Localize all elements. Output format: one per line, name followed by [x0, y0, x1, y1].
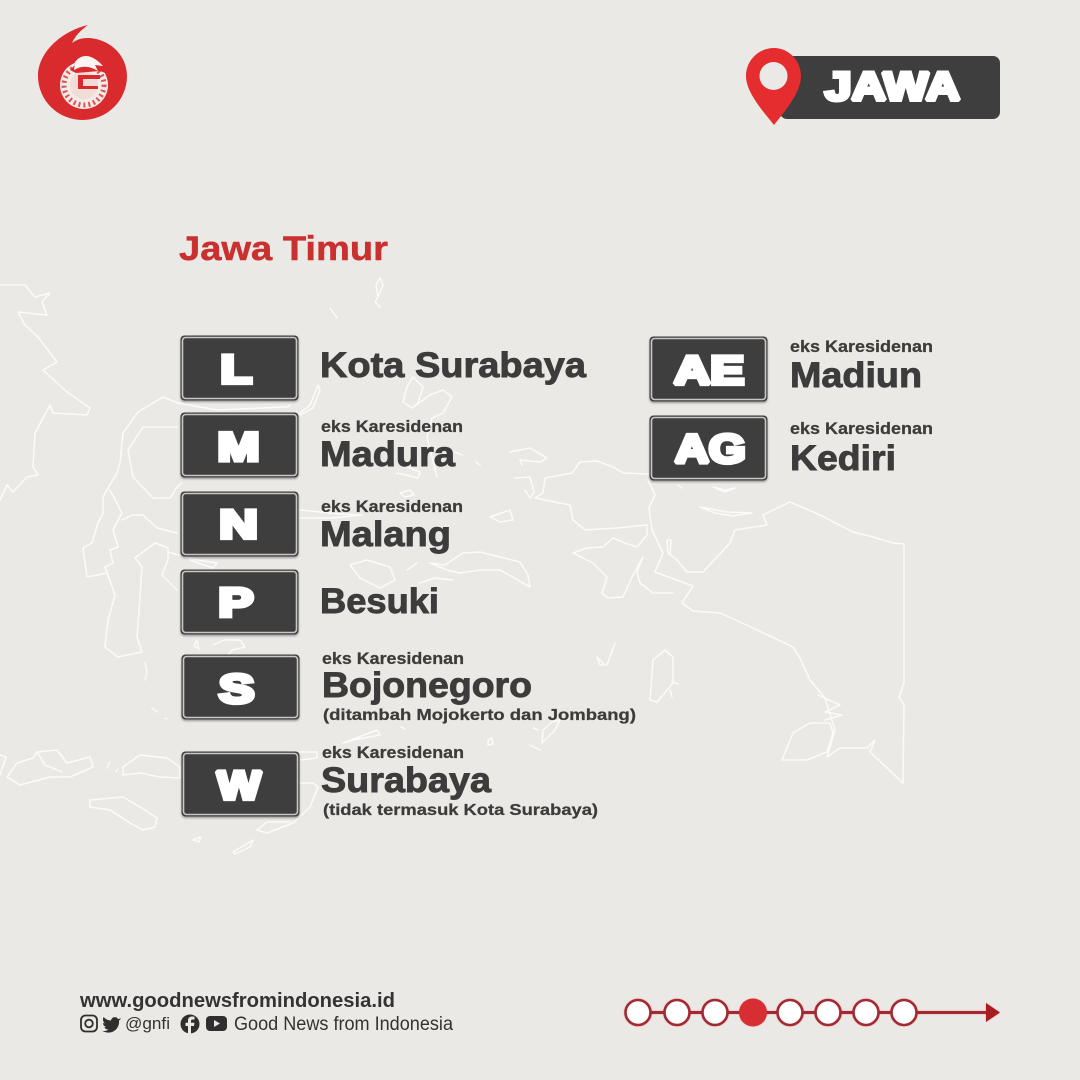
plate row: AE: eks Karesidenan — [790, 337, 933, 356]
plate row: P — [180, 570, 439, 634]
plate row: AG: AG — [675, 428, 746, 472]
plate row: N: eks Karesidenan — [321, 497, 463, 516]
website url: www.goodnewsfromindonesia.id — [79, 990, 395, 1012]
heading: Jawa Timur: Jawa Timur — [179, 230, 388, 268]
plate row: P: Besuki — [320, 582, 439, 621]
plate row: W: W — [217, 764, 261, 808]
location badge: JAWA — [746, 48, 1000, 125]
plate row: P: P — [218, 581, 253, 625]
plate row: M — [180, 412, 463, 478]
plate row: AG: eks Karesidenan — [790, 419, 933, 438]
icon: youtube — [206, 1016, 227, 1031]
logo — [38, 25, 127, 120]
plate row: S — [182, 649, 636, 724]
plate row: AE — [650, 336, 933, 402]
plate row: S: eks Karesidenan — [322, 649, 464, 668]
progress tracker with arrow — [626, 998, 1000, 1026]
badge label: JAWA — [825, 65, 960, 109]
plate row: S: Bojonegoro — [322, 666, 532, 705]
plate row: AE: Madiun — [790, 356, 922, 395]
plate row: L: L — [220, 348, 252, 392]
footer: website and social — [79, 990, 453, 1035]
plate row: AG — [650, 416, 933, 480]
plate row: L: Kota Surabaya — [320, 346, 587, 385]
plate row: M: eks Karesidenan — [321, 417, 463, 436]
icon: map pin — [746, 48, 801, 125]
plate row: W: (tidak termasuk Kota Surabaya) — [323, 802, 598, 819]
plate row: S: (ditambah Mojokerto dan Jombang) — [323, 707, 636, 724]
icon: facebook — [180, 1014, 200, 1034]
plate row: M: M — [218, 425, 259, 469]
plate row: N: N — [219, 503, 258, 547]
plate row: W — [182, 743, 598, 819]
icon: twitter — [102, 1017, 121, 1033]
plate row: W: eks Karesidenan — [322, 743, 464, 762]
background map of eastern Indonesia — [0, 278, 904, 854]
icon: instagram — [81, 1016, 97, 1032]
plate row: S: S — [219, 668, 254, 712]
plate row: W: Surabaya — [321, 761, 492, 800]
social handle: @gnfi — [125, 1014, 170, 1033]
plate row: N — [180, 492, 463, 556]
plate row: N: Malang — [320, 515, 451, 554]
plate row: M: Madura — [320, 435, 456, 474]
plate row: AE: AE — [674, 349, 744, 393]
plate row: AG: Kediri — [790, 439, 896, 478]
social name: Good News from Indonesia — [234, 1014, 453, 1035]
plate row: L — [180, 336, 587, 400]
